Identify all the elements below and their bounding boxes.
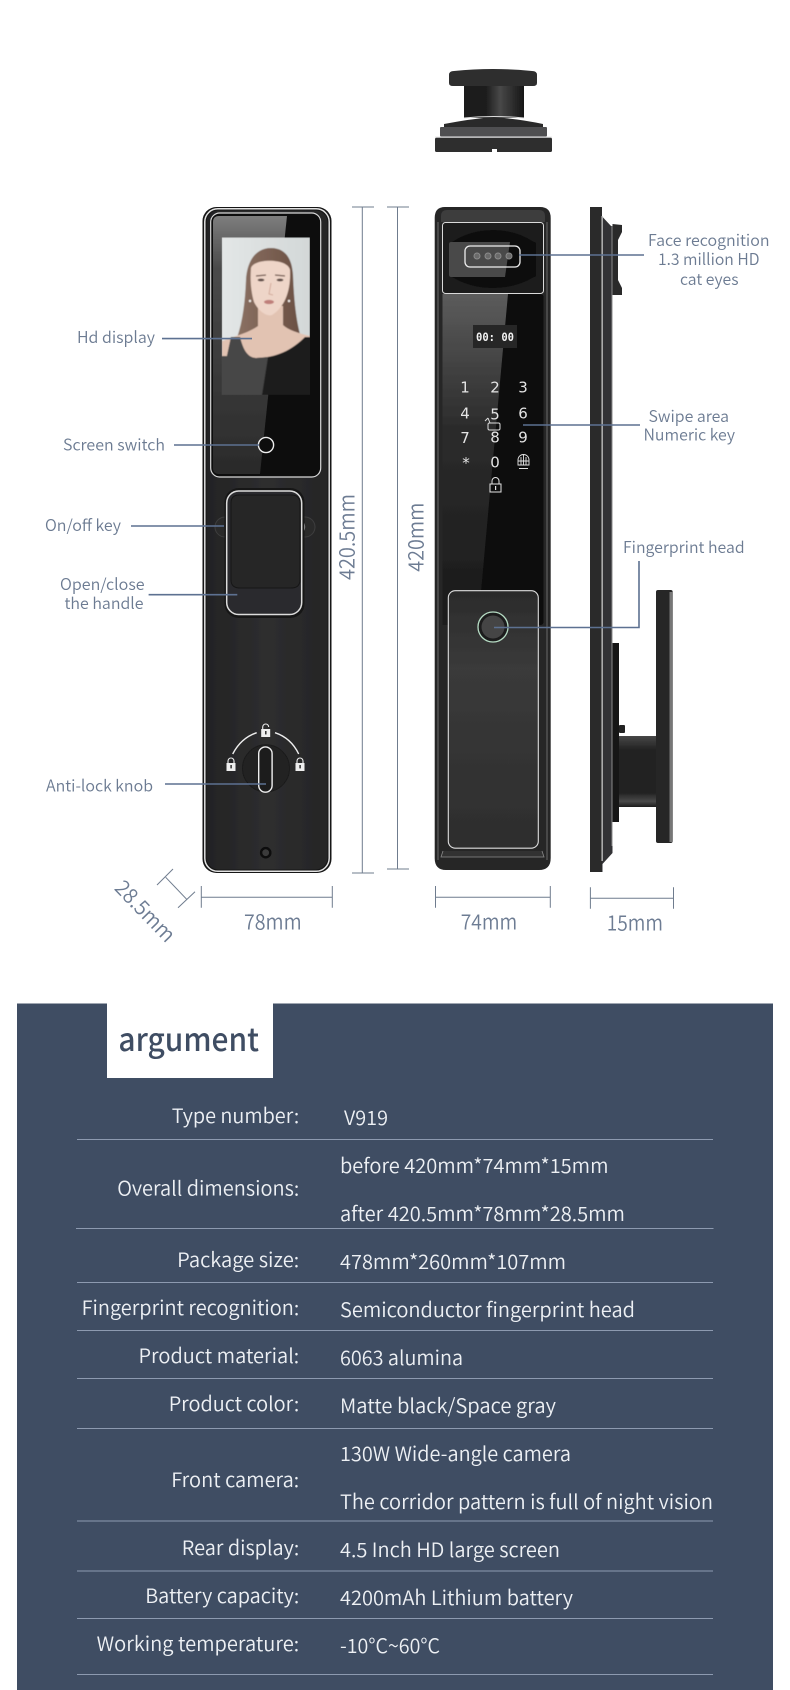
icon: lock top (open) [261,724,270,737]
row: Rear display [182,1532,560,1563]
row: Product material: Product material: [138,1340,299,1369]
display panel [211,213,321,477]
dimension: 74mm width: 74mm [461,906,517,936]
dimension: 78mm width [201,886,332,936]
dimension: 420.5mm height [332,207,374,873]
row: Rear display: Rear display: [182,1532,299,1561]
numeric keys: 4 [460,404,470,422]
numeric keys: 5 [490,406,500,424]
callout: Open/close the handle [60,571,237,614]
row: Type number: V919 [344,1102,388,1131]
clock readout [473,325,517,348]
row: Type number [172,1100,388,1131]
bottom keyhole [261,848,270,857]
row: Overall dimensions: before 420mm*74mm*15mm [340,1150,608,1179]
side profile of lock [590,207,673,872]
row: Front camera: 130W Wide-angle camera [340,1438,571,1467]
row: Fingerprint recognition: Semiconductor fingerprint head [340,1294,635,1323]
callout: Face recognition camera: cat eyes [680,266,738,290]
row: Package size: 478mm*260mm*107mm [340,1246,566,1275]
numeric keys: 7 [460,429,470,447]
row: Product color: Matte black/Space gray [340,1390,556,1419]
callout: Fingerprint head [494,534,745,628]
numeric keys: 1 [460,378,470,396]
callout: Face recognition camera: 1.3 million HD [658,246,760,270]
top view of handle knob [435,69,552,152]
numeric keys [460,378,528,472]
icon: bell key [518,455,529,468]
row: Battery capacity [145,1580,573,1611]
row: Overall dimensions: Overall dimensions: [117,1172,299,1202]
screen switch ring [258,437,274,453]
row: Product material: 6063 alumina [340,1342,463,1371]
row: Overall dimensions [117,1150,625,1227]
front view of lock: rear panel [202,207,332,873]
callout: Anti-lock knob: Anti-lock knob [46,772,153,796]
anti-lock knob with lock icons [226,724,304,792]
face recognition camera module [442,222,544,294]
glass keypad panel [442,294,544,625]
numeric keys: 8 [490,428,500,446]
row: Working temperature [97,1628,440,1659]
callout: Hd display: Hd display [77,324,155,348]
portrait on screen [221,237,311,395]
dimension: 420.5mm height: 420.5mm [332,494,362,580]
dimension: 28.5mm depth: 28.5mm [108,873,183,949]
numeric keys: * [462,454,470,472]
callout: Screen switch: Screen switch [63,432,165,456]
row: Working temperature: -10°C~60°C [340,1630,440,1659]
row: Front camera: Front camera: [171,1464,299,1493]
row: Product material [138,1340,463,1371]
numeric keys: 9 [518,428,528,446]
icon: keypad lock [490,478,501,492]
dimension: 420mm height: 420mm [400,503,430,572]
callout: Open/close the handle: the handle [64,590,144,614]
row: Battery capacity: Battery capacity: [145,1580,299,1609]
row: Fingerprint recognition [82,1292,635,1323]
callout: Open/close the handle: Open/close [60,571,145,595]
callout: Fingerprint head: Fingerprint head [623,534,745,558]
row: Type number: Type number: [172,1100,299,1129]
row: Rear display: 4.5 Inch HD large screen [340,1534,560,1563]
row: Overall dimensions: after 420.5mm*78mm*28.5mm [340,1198,625,1227]
numeric keys: 3 [518,378,528,396]
dimension: 15mm depth [590,887,674,938]
dimension: 74mm width [436,886,550,936]
callout: Swipe area numeric key: Numeric key [644,422,735,446]
numeric keys: 2 [490,378,500,396]
dimension: 420mm height [387,207,430,869]
row: Product color: Product color: [169,1388,299,1417]
dimension: 78mm width: 78mm [244,906,302,936]
row: Fingerprint recognition: Fingerprint recognition: [82,1292,299,1321]
panel: argument parameters [17,1004,773,1690]
outer lock panel front [435,207,551,870]
dimension: 15mm depth: 15mm [607,908,663,938]
fingerprint sensor [478,612,508,642]
row: Front camera [171,1438,713,1515]
callout: Swipe area numeric key: Swipe area [648,403,729,427]
handle with white outline [215,488,315,618]
row: Product color [169,1388,556,1419]
row: Working temperature: Working temperature: [97,1628,299,1657]
icon: swipe hand [485,418,500,430]
row: Package size: Package size: [177,1244,299,1273]
row: Package size [177,1244,566,1275]
callout: Swipe area numeric key [523,403,735,446]
callout: Face recognition camera [519,227,770,290]
clock readout: 00: 00 [476,330,514,344]
row: Battery capacity: 4200mAh Lithium battery [340,1582,573,1611]
callout: Face recognition camera: Face recognition [648,227,770,251]
numeric keys: 6 [518,404,528,422]
heading tab: argument [107,1004,273,1078]
icon: lock left [226,758,236,771]
heading tab: argument: argument [118,1015,259,1061]
icon: lock right [296,758,304,771]
row: Front camera: The corridor pattern is full of night vision [340,1486,713,1515]
numeric keys: 0 [490,454,500,472]
callout: On/off key: On/off key [45,512,121,536]
fingerprint handle panel [441,591,544,857]
